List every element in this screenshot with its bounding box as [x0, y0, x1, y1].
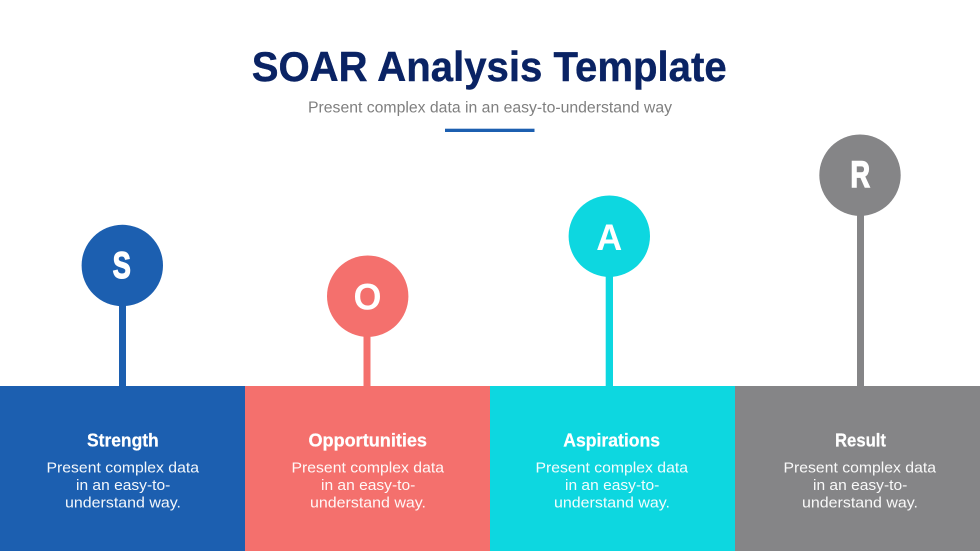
opportunities heading: Opportunities [308, 430, 427, 451]
subtitle: Present complex data in an easy-to-understand way [308, 99, 672, 116]
opportunities text [292, 459, 445, 511]
aspirations text: in an easy-to- [565, 477, 659, 494]
title underline [445, 129, 534, 132]
strength text [46, 459, 200, 511]
result text [784, 459, 937, 511]
result heading: Result [835, 430, 886, 451]
panel: result [735, 134, 980, 551]
strength circle [82, 225, 163, 306]
opportunities text: in an easy-to- [321, 477, 415, 494]
opportunities circle [327, 256, 408, 337]
strength stem [119, 300, 126, 390]
letter R: R [850, 154, 870, 195]
title: SOAR Analysis Template [252, 43, 727, 90]
result circle [819, 134, 901, 216]
opportunities text: Present complex data [292, 459, 445, 476]
strength text: Present complex data [46, 459, 200, 476]
strength text: understand way. [65, 494, 181, 511]
result text: in an easy-to- [813, 477, 907, 494]
aspirations text: understand way. [554, 494, 670, 511]
aspirations stem [606, 270, 613, 390]
panel: aspirations [490, 196, 735, 551]
opportunities box [245, 386, 490, 551]
result text: Present complex data [784, 459, 937, 476]
header [252, 43, 727, 132]
result stem [857, 210, 864, 390]
strength heading: Strength [87, 430, 159, 451]
aspirations box [490, 386, 735, 551]
result box [735, 386, 980, 551]
letter S: S [113, 245, 131, 286]
strength text: in an easy-to- [76, 477, 170, 494]
aspirations text: Present complex data [536, 459, 689, 476]
aspirations circle [569, 196, 650, 277]
opportunities text: understand way. [310, 494, 426, 511]
letter O: O [354, 276, 382, 317]
panel: strength [0, 225, 245, 551]
strength box [0, 386, 245, 551]
result text: understand way. [802, 494, 918, 511]
aspirations text [536, 459, 689, 511]
aspirations heading: Aspirations [563, 430, 660, 451]
letter A: A [596, 217, 622, 258]
opportunities stem [364, 330, 370, 390]
panel: opportunities [245, 256, 490, 551]
